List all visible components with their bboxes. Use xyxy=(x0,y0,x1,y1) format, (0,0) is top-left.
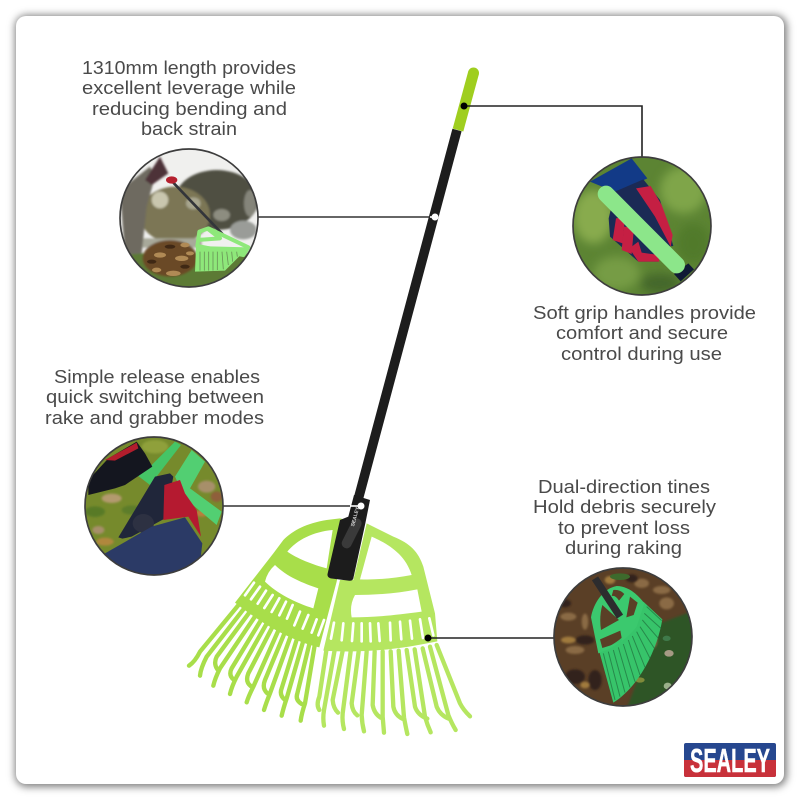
photo: rake on leaves xyxy=(553,567,693,707)
black clip xyxy=(327,495,370,581)
leader line: tines xyxy=(424,634,555,642)
clip logo: SEALEY xyxy=(350,506,361,527)
text: tines: during raking xyxy=(565,537,682,558)
text: grip: comfort and secure xyxy=(556,322,728,343)
text: tines: Dual-direction tines xyxy=(538,476,710,497)
leader line: release xyxy=(222,502,364,510)
frame in photo xyxy=(591,586,644,653)
slots xyxy=(245,583,433,641)
text: grip: Soft grip handles provide xyxy=(533,302,756,323)
right frame xyxy=(323,523,437,651)
leader line: grip xyxy=(460,102,642,157)
text: length: 1310mm length provides xyxy=(82,57,296,78)
text: grip: control during use xyxy=(561,343,722,364)
left tines xyxy=(189,604,315,721)
text: release: quick switching between xyxy=(46,386,264,407)
text: length: excellent leverage while xyxy=(82,77,296,98)
text: tines: Hold debris securely xyxy=(533,496,717,517)
photo: gloved hand on soft grip xyxy=(572,156,712,296)
text: tines: to prevent loss xyxy=(558,517,690,538)
photo: release clip in hand xyxy=(84,436,224,576)
clip button xyxy=(347,523,357,543)
text: release: Simple release enables xyxy=(54,366,260,387)
text: release xyxy=(45,366,264,428)
rake handle grip xyxy=(458,73,474,130)
left frame xyxy=(235,518,347,647)
rake product xyxy=(189,68,479,734)
text: length: back strain xyxy=(141,118,237,139)
text: tines xyxy=(533,476,717,558)
grass xyxy=(628,612,692,705)
right tines xyxy=(318,645,470,734)
text: release: rake and grabber modes xyxy=(45,407,264,428)
text: grip xyxy=(533,302,756,364)
photo: person raking leaves xyxy=(119,148,259,288)
tines in photo xyxy=(599,602,662,703)
clip in photo xyxy=(595,578,620,617)
text: length xyxy=(82,57,296,139)
rake head xyxy=(189,495,470,734)
rake handle shaft xyxy=(358,130,457,500)
leader line: length xyxy=(258,214,438,220)
text: length: reducing bending and xyxy=(92,98,287,119)
